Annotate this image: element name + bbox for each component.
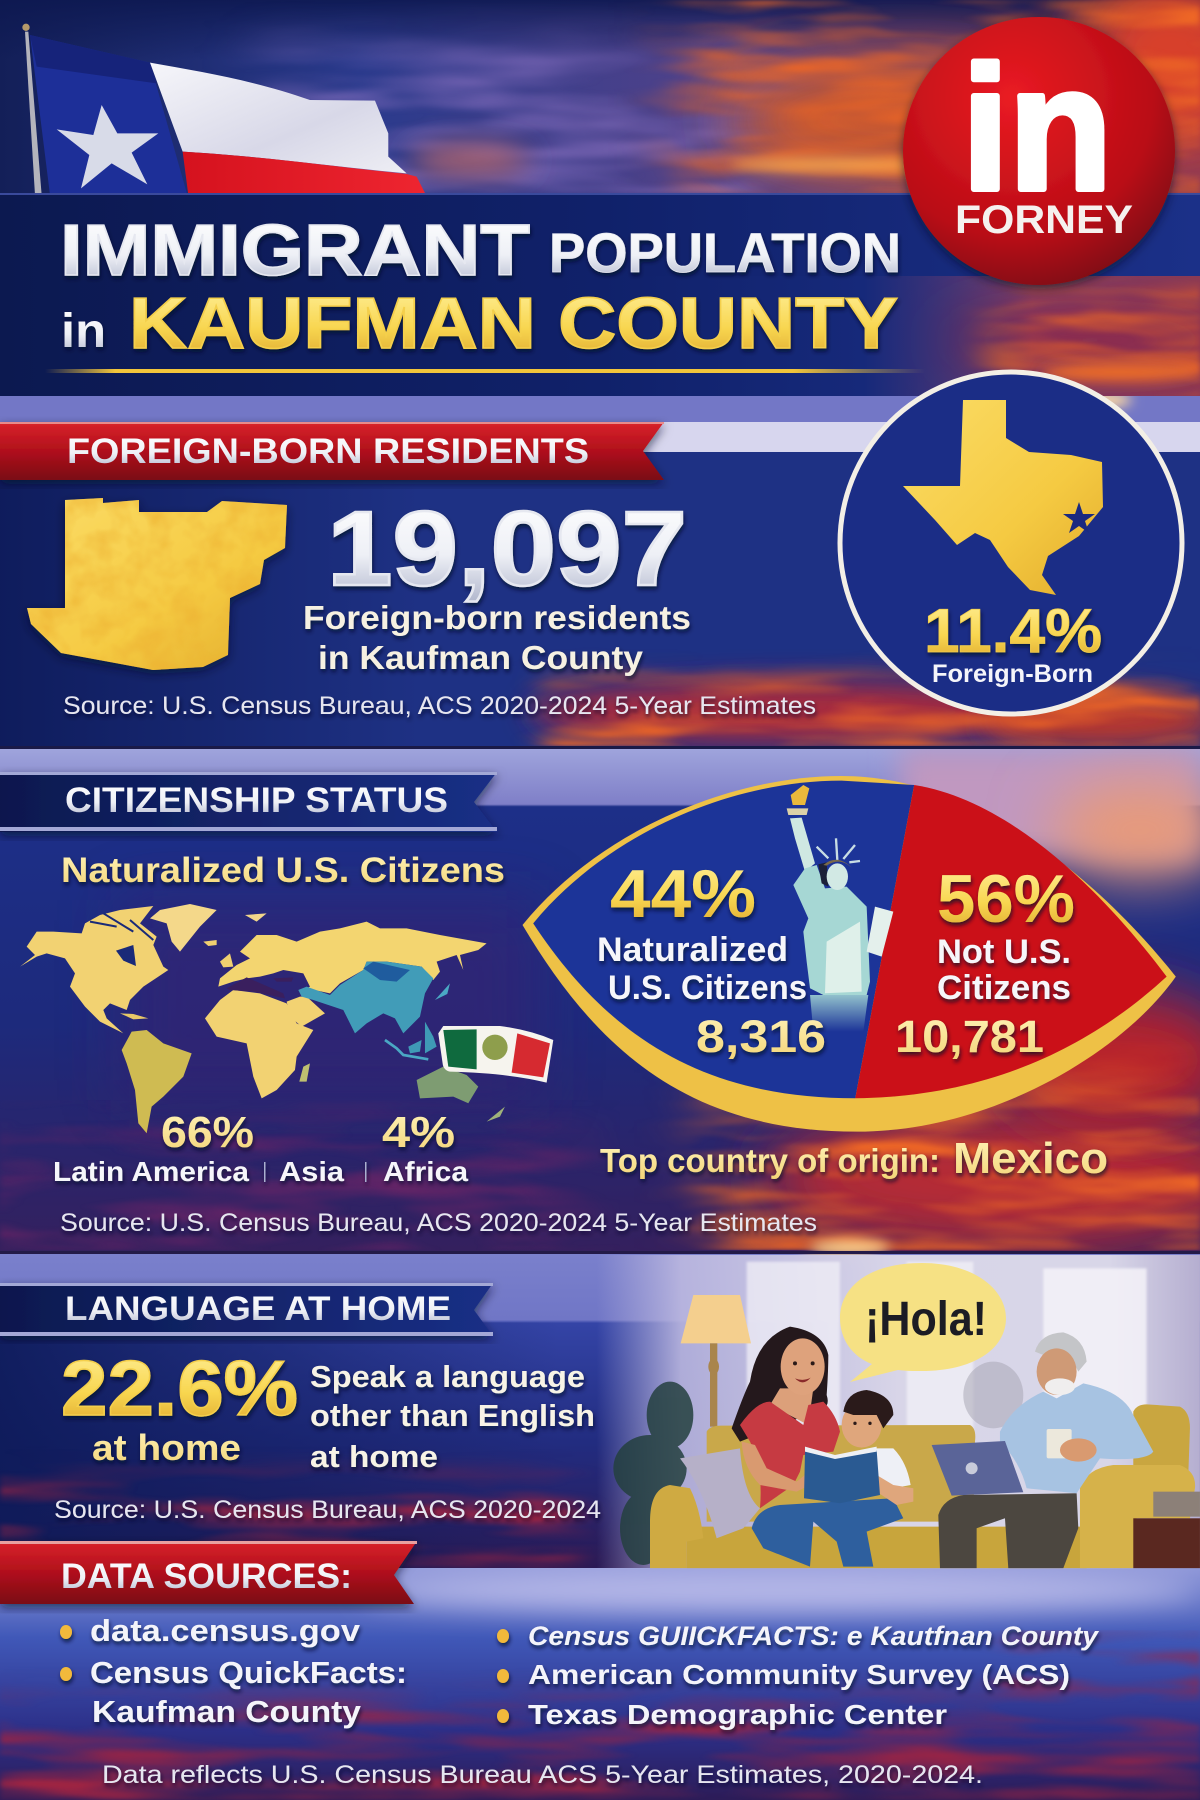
callout: top country of origin xyxy=(600,1134,1108,1183)
callout: top country of origin: Top country of origin: xyxy=(600,1142,940,1179)
stat: 19,097: 19,097 xyxy=(327,490,687,608)
stats: regional shares: 66% xyxy=(161,1108,254,1157)
panel: data sources xyxy=(0,1541,1100,1789)
stat: 44% naturalized xyxy=(597,856,826,1062)
heading ribbon: language at home xyxy=(0,1283,493,1336)
icon: Kaufman County map xyxy=(27,498,287,670)
panel: foreign-born residents xyxy=(0,372,1182,720)
text: foreign-born residents caption: Foreign-born residents xyxy=(303,599,691,636)
icon: Mexico flag xyxy=(438,1026,553,1083)
heading ribbon: foreign-born residents xyxy=(0,422,664,480)
title xyxy=(60,211,901,364)
illustration: family on sofa xyxy=(597,1255,1200,1568)
heading ribbon: data sources: DATA SOURCES: xyxy=(61,1557,352,1596)
list: sources left: Census QuickFacts: xyxy=(90,1655,407,1690)
panel: language at home xyxy=(0,1255,1200,1568)
stat: 22.6%: at home xyxy=(92,1427,241,1468)
stat: 44% naturalized: U.S. Citizens xyxy=(608,969,807,1007)
stat: 56% not citizens: 56% xyxy=(937,861,1075,937)
heading ribbon: language at home: LANGUAGE AT HOME xyxy=(65,1290,451,1328)
text: language description: other than English xyxy=(310,1398,595,1433)
heading ribbon: data sources xyxy=(0,1541,417,1604)
logo: in Forney: in xyxy=(962,31,1112,227)
label: foreign-born: Foreign-Born xyxy=(932,660,1093,688)
source note: Source: U.S. Census Bureau, ACS 2020-2024 xyxy=(54,1496,601,1524)
callout: speech bubble ¡Hola! xyxy=(840,1263,1006,1382)
stats: regional shares: 4% xyxy=(382,1108,455,1157)
title: IMMIGRANT xyxy=(60,211,530,291)
logo: in Forney: FORNEY xyxy=(955,198,1133,242)
title band xyxy=(0,193,1200,396)
text: language description: at home xyxy=(310,1439,438,1474)
list: sources right: Census GUIICKFACTS: e Kautfnan County xyxy=(528,1621,1100,1651)
logo: in Forney xyxy=(903,17,1175,285)
stats: regional shares: Latin America xyxy=(53,1156,249,1187)
title: POPULATION xyxy=(549,221,901,284)
heading: naturalized U.S. citizens: Naturalized U.S. Citizens xyxy=(61,851,505,890)
list: sources right: Texas Demographic Center xyxy=(528,1699,947,1730)
list: sources right: American Community Survey (ACS) xyxy=(528,1659,1070,1690)
heading ribbon: foreign-born residents: FOREIGN-BORN RESIDENTS xyxy=(67,432,589,471)
stat: 56% not citizens xyxy=(895,861,1075,1062)
stats: regional shares: Asia xyxy=(279,1156,344,1187)
stat: 22.6%: 22.6% xyxy=(61,1344,298,1432)
footer note: Data reflects U.S. Census Bureau ACS 5-Year Estimates, 2020-2024. xyxy=(102,1761,983,1789)
list: sources left: Kaufman County xyxy=(92,1694,362,1729)
title: in xyxy=(61,305,106,358)
stat: 11.4%: 11.4% xyxy=(924,597,1102,666)
heading ribbon: citizenship status xyxy=(0,772,497,832)
stat: 44% naturalized: 44% xyxy=(610,856,756,932)
callout: top country of origin: Mexico xyxy=(953,1134,1108,1183)
panel: Texas 11.4% badge xyxy=(840,372,1182,714)
stat: 44% naturalized: 8,316 xyxy=(696,1011,826,1062)
text: language description xyxy=(310,1359,595,1474)
stats: regional shares: Africa xyxy=(383,1156,468,1187)
icon: Statue of Liberty xyxy=(787,785,893,1032)
list: sources right xyxy=(497,1621,1100,1730)
stat: 44% naturalized: Naturalized xyxy=(597,931,788,969)
text: foreign-born residents caption xyxy=(303,599,691,676)
stat: 56% not citizens: Citizens xyxy=(937,969,1071,1007)
list: sources left xyxy=(60,1613,407,1729)
stat: 56% not citizens: 10,781 xyxy=(895,1011,1044,1062)
source note: Source: U.S. Census Bureau, ACS 2020-2024 5-Year Estimates xyxy=(63,692,816,720)
world map xyxy=(20,904,553,1133)
chart: citizenship split xyxy=(522,776,1176,1132)
stat: 56% not citizens: Not U.S. xyxy=(937,933,1071,971)
icon: star on Texas xyxy=(1063,502,1095,533)
text: language description: Speak a language xyxy=(310,1359,585,1394)
text: foreign-born residents caption: in Kaufman County xyxy=(318,639,644,676)
panel: citizenship status xyxy=(0,772,1176,1237)
list: sources left: data.census.gov xyxy=(90,1613,361,1648)
stat: 22.6% xyxy=(61,1344,298,1468)
title: KAUFMAN COUNTY xyxy=(129,284,898,364)
source note: Source: U.S. Census Bureau, ACS 2020-2024 5-Year Estimates xyxy=(60,1209,817,1237)
icon: Texas map xyxy=(903,400,1103,595)
texas flag xyxy=(22,24,426,195)
stats: regional shares xyxy=(53,1108,468,1187)
heading ribbon: citizenship status: CITIZENSHIP STATUS xyxy=(65,781,448,820)
callout: speech bubble ¡Hola!: ¡Hola! xyxy=(865,1293,987,1346)
